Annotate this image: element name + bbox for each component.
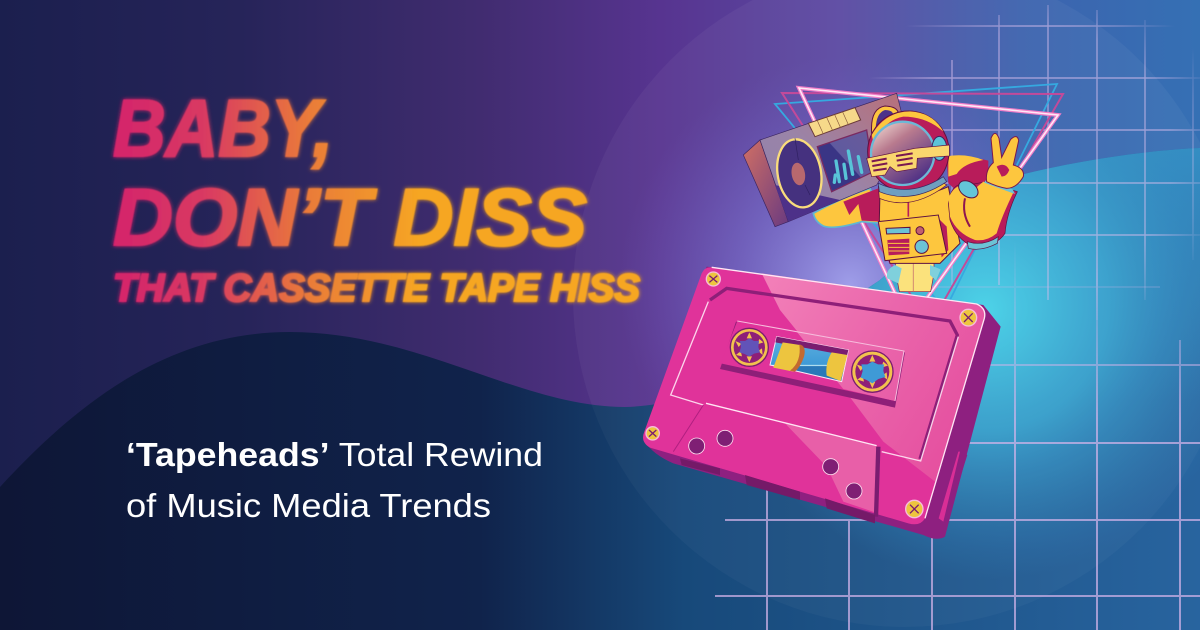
subtitle line 1: ‘Tapeheads’ Total Rewind <box>126 436 543 473</box>
headset <box>932 136 947 160</box>
label recess <box>671 288 958 461</box>
equalizer screen <box>817 130 873 192</box>
dark wave shape <box>0 148 1200 630</box>
title line 1: BABY, <box>113 84 333 174</box>
legs <box>887 255 941 292</box>
side clip <box>937 450 967 526</box>
helmet shell <box>868 111 949 192</box>
screw top right <box>960 309 977 326</box>
torso <box>879 187 960 263</box>
neon triangles <box>775 84 1063 325</box>
neon grid, lower <box>715 240 1200 630</box>
screw top left <box>706 272 720 286</box>
boombox front <box>760 93 907 222</box>
cassette body depth <box>643 267 1001 539</box>
shoulder <box>947 158 988 195</box>
boombox side <box>743 140 788 227</box>
left reel hub <box>730 328 768 366</box>
front white edge <box>712 267 985 518</box>
astronaut with boombox <box>743 93 1024 292</box>
blue triangle <box>775 84 1057 310</box>
cassette front <box>643 267 985 524</box>
speaker <box>772 136 827 211</box>
neon grid, upper <box>850 5 1200 320</box>
yellow cassette buttons <box>808 108 861 137</box>
lower trapezoid plate <box>673 403 878 517</box>
reel panel <box>720 321 905 408</box>
helmet rear pad <box>871 106 898 140</box>
trapezoid holes <box>689 430 862 499</box>
title line 3: THAT CASSETTE TAPE HISS <box>113 267 640 310</box>
glossy highlight <box>762 273 985 482</box>
cassette tape <box>643 267 1001 539</box>
subtitle line 2: of Music Media Trends <box>126 487 491 524</box>
main white-pink triangle <box>799 88 1058 323</box>
equalizer bars <box>834 151 862 182</box>
central purple glow <box>600 50 1100 520</box>
title line 2: DON’T DISS <box>113 173 587 263</box>
corner screws <box>646 272 977 518</box>
right reel hub <box>852 351 893 392</box>
screw bottom left <box>646 427 659 440</box>
left arm <box>813 188 883 227</box>
boombox <box>743 93 907 227</box>
right arm <box>948 182 1017 247</box>
shutter glasses <box>867 145 949 177</box>
elbow patch <box>955 177 981 201</box>
visor <box>871 122 934 185</box>
screw bottom right <box>906 500 923 518</box>
bottom notches <box>680 458 875 523</box>
left arm crimson folds <box>843 188 883 222</box>
subtitle <box>126 436 543 524</box>
helmet <box>867 106 949 203</box>
large translucent circle <box>573 0 1200 627</box>
chest control box <box>878 215 948 261</box>
tape window <box>770 337 848 382</box>
title <box>113 84 640 310</box>
pink triangle <box>782 93 1063 325</box>
peace hand <box>984 133 1024 194</box>
boombox dark lower face <box>775 185 877 222</box>
sleeve cuff <box>967 237 998 249</box>
